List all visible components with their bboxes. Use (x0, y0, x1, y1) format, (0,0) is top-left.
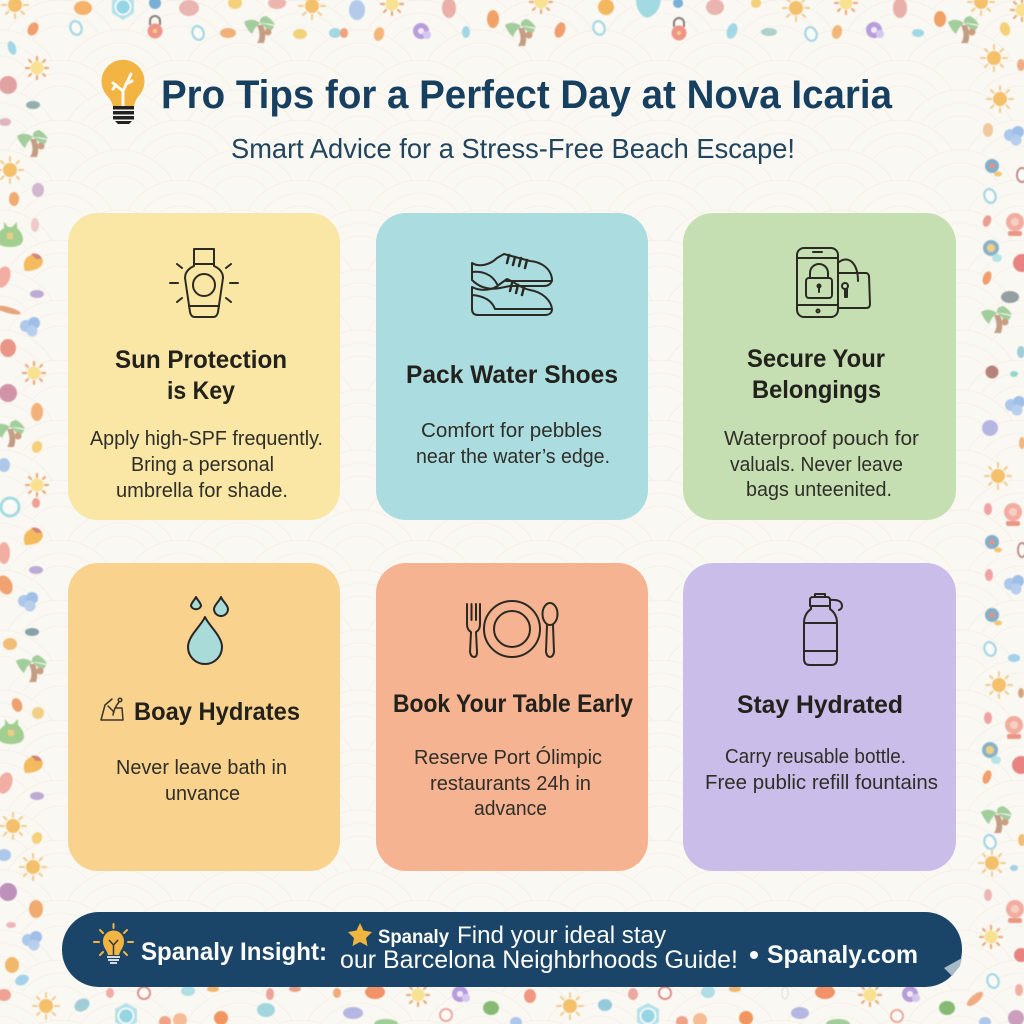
panel: secure belongings (683, 213, 956, 520)
title block (101, 60, 893, 164)
icon: sunscreen bottle (170, 249, 238, 317)
insight message: Find your ideal stay (457, 922, 666, 949)
heading: Belongings (752, 376, 881, 404)
icon: star (348, 923, 372, 946)
description: advance (474, 798, 547, 820)
subtitle: Smart Advice for a Stress-Free Beach Escape! (231, 133, 795, 164)
description (724, 428, 919, 501)
insight message (340, 922, 738, 974)
bullet separator (750, 951, 758, 959)
description: Bring a personal (131, 454, 274, 476)
description: Waterproof pouch for (724, 428, 919, 450)
icon: reusable bottle (804, 594, 842, 665)
description: restaurants 24h in (430, 773, 591, 795)
description (116, 757, 287, 805)
panel: body hydrates (68, 563, 340, 871)
heading: Stay Hydrated (737, 691, 903, 719)
callout banner (62, 912, 962, 987)
heading (747, 345, 885, 404)
panel: stay hydrated (683, 563, 956, 871)
description (416, 420, 610, 468)
insight label: Spanaly Insight: (141, 938, 327, 966)
heading: Book Your Table Early (393, 690, 633, 718)
heading (115, 346, 287, 405)
icon: water drops (188, 597, 228, 664)
description: Apply high-SPF frequently. (90, 428, 323, 450)
left border icons (0, 40, 48, 1001)
bottom border icons (33, 984, 991, 1024)
description: Free public refill fountains (705, 772, 938, 794)
icon: lightbulb (101, 60, 144, 124)
heading: is Key (167, 377, 235, 405)
heading: Pack Water Shoes (406, 361, 618, 389)
right border icons (965, 45, 1024, 1024)
insight message: our Barcelona Neighbrhoods Guide! (340, 946, 738, 974)
description: Reserve Port Ólimpic (414, 746, 602, 769)
heading: Boay Hydrates (134, 698, 300, 726)
icon: phone lock and bag (797, 248, 870, 317)
description: umbrella for shade. (116, 480, 288, 502)
icon: small bag and brush (101, 698, 123, 720)
description: near the water’s edge. (416, 446, 610, 468)
icon: plate and cutlery (467, 601, 558, 657)
description: unvance (165, 783, 240, 805)
heading: Sun Protection (115, 346, 287, 374)
description: Never leave bath in (116, 757, 287, 779)
top border icons (2, 0, 1024, 46)
insight message: Spanaly (378, 927, 449, 948)
icon: banner lightbulb (94, 924, 133, 963)
panel: water shoes (376, 213, 648, 520)
panel: book table (376, 563, 648, 871)
description (90, 428, 323, 502)
description: Comfort for pebbles (421, 420, 602, 442)
heading: Secure Your (747, 345, 885, 373)
description: Carry reusable bottle. (725, 746, 906, 768)
panel: sun protection (68, 213, 340, 520)
description (414, 746, 602, 820)
description (705, 746, 938, 794)
website: Spanaly.com (767, 941, 918, 969)
description: bags unteenited. (746, 479, 892, 501)
title: Pro Tips for a Perfect Day at Nova Icaria (161, 73, 893, 117)
description: valuals. Never leave (730, 454, 903, 476)
icon: shoes (472, 254, 552, 315)
